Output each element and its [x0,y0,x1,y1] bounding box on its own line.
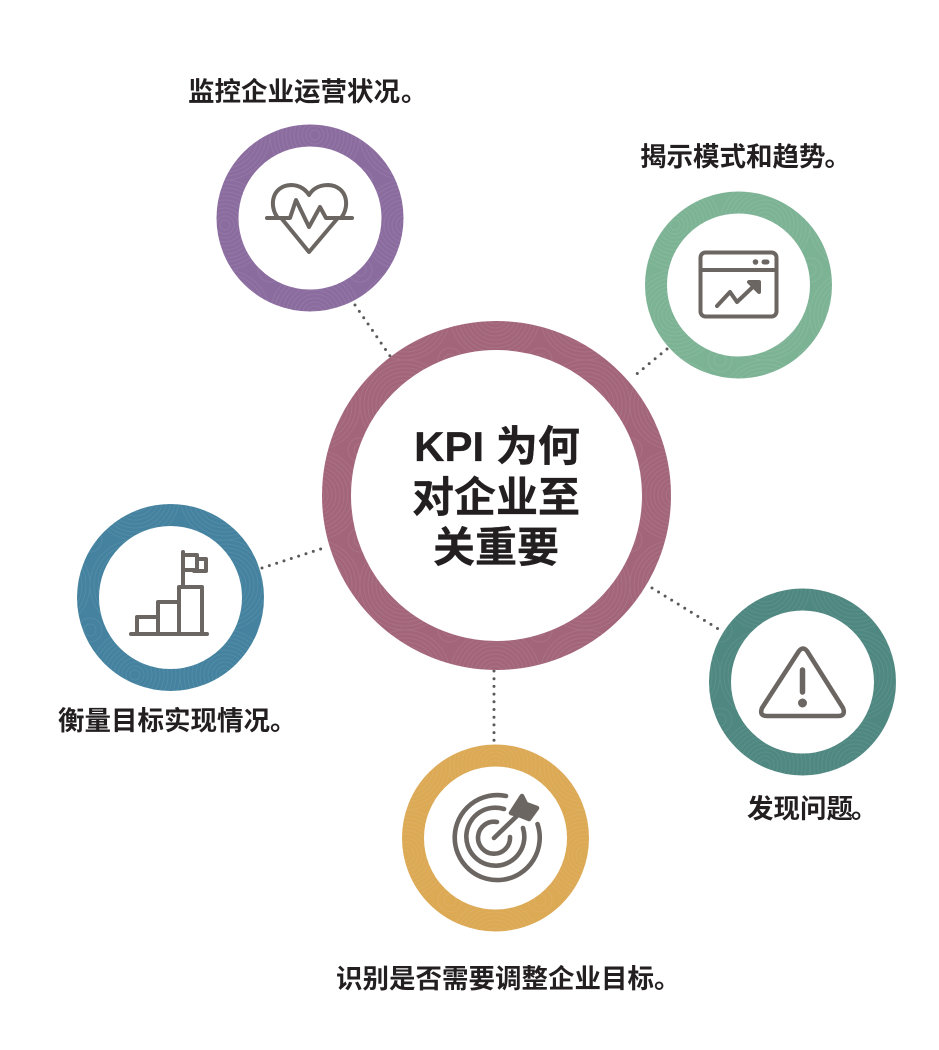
label: patterns and trends: 揭示模式和趋势。 [640,142,851,172]
panel: adjust targets [336,756,680,994]
icon: target with arrow [455,795,540,880]
center panel: KPI ring and title [336,336,656,656]
icon: warning triangle [761,648,844,716]
label: monitoring: 监控企业运营状况。 [188,77,428,107]
panel: identify problems [720,600,885,824]
dotted connector: adjust targets [492,671,496,742]
label: identify problems: 发现问题。 [747,794,878,824]
center title: 对企业至 [412,474,580,521]
panel: goal achievement [58,515,296,736]
icon: heart with pulse [267,185,352,252]
dotted connector: problems [652,588,720,630]
icon: browser window with rising chart [700,252,776,316]
dotted connector: monitoring [355,305,390,356]
dotted connector: goals [262,547,327,568]
label: adjust targets: 识别是否需要调整企业目标。 [336,964,680,994]
center title: KPI 为何 [414,423,580,470]
panel: monitoring [188,77,428,300]
icon: stairs with flag [131,552,207,634]
dotted connector: patterns [633,349,667,377]
center title: 关重要 [433,524,559,571]
panel: patterns and trends [640,142,851,368]
label: goal achievement: 衡量目标实现情况。 [58,706,296,736]
